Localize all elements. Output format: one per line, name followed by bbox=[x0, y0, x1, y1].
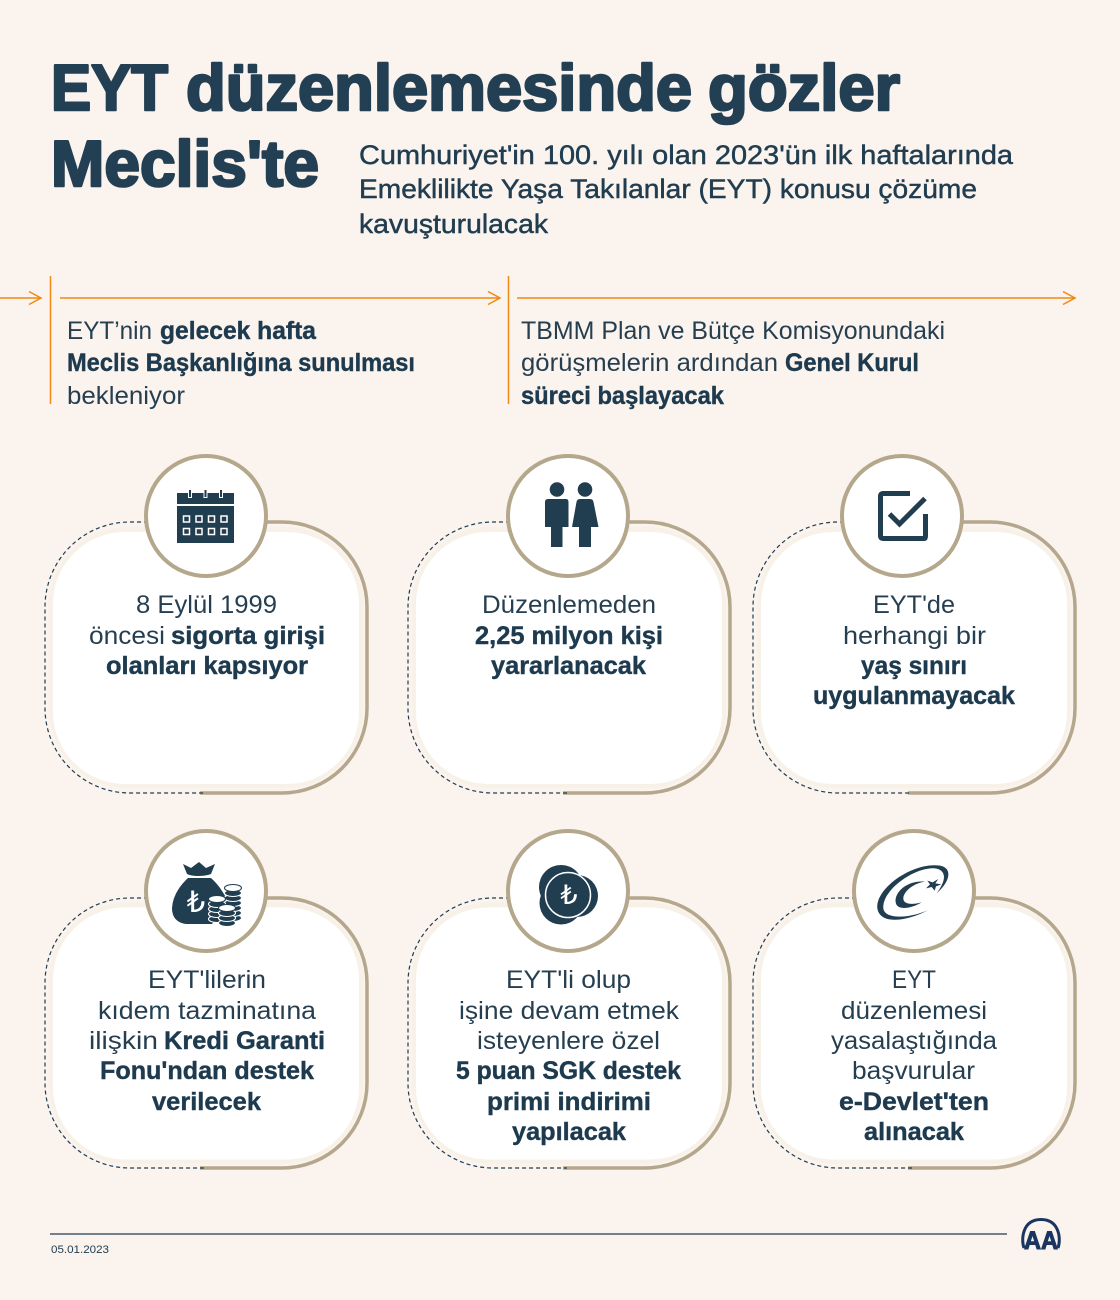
text: step 1: Meclis Başkanlığına sunulması bbox=[67, 349, 415, 377]
subtitle: kavuşturulacak bbox=[359, 209, 549, 239]
card 5 text: işine devam etmek bbox=[459, 997, 680, 1025]
card 4 text: verilecek bbox=[152, 1088, 261, 1116]
icon: coins: ₺ bbox=[560, 880, 578, 911]
card 6 text: yasalaştığında bbox=[831, 1027, 997, 1055]
text: step 1: EYT’nin bbox=[67, 317, 152, 345]
subtitle bbox=[359, 140, 1014, 239]
card 2 text bbox=[475, 591, 663, 680]
card 5 text: isteyenlere özel bbox=[477, 1027, 660, 1055]
card 6 text: alınacak bbox=[864, 1118, 964, 1146]
panel: card 1 bbox=[45, 456, 367, 793]
panel: card 3 bbox=[753, 456, 1075, 793]
card 6 text bbox=[831, 966, 997, 1146]
card 5 frame bbox=[408, 831, 730, 1168]
card 5 text: 5 puan SGK destek bbox=[456, 1057, 681, 1085]
card 2 text: 2,25 milyon kişi bbox=[475, 622, 663, 650]
card 3 text: EYT'de bbox=[873, 591, 955, 619]
panel: card 6 bbox=[753, 831, 1075, 1168]
card 6 text: e-Devlet'ten bbox=[839, 1088, 989, 1116]
panel: card 5 bbox=[408, 831, 730, 1168]
card 4 text: ilişkin bbox=[89, 1027, 158, 1055]
card 5 text: yapılacak bbox=[512, 1118, 626, 1146]
title: gözler bbox=[708, 51, 900, 124]
text: step 1: gelecek hafta bbox=[160, 317, 317, 345]
card 4 text: kıdem tazminatına bbox=[98, 997, 316, 1025]
card 6 text: EYT bbox=[892, 966, 936, 994]
subtitle: Cumhuriyet'in 100. yılı olan 2023'ün ilk haftalarında bbox=[359, 140, 1014, 170]
panel: card 2 bbox=[408, 456, 730, 793]
panel: card 4 bbox=[45, 831, 367, 1168]
icon: money bag: ₺ bbox=[187, 885, 205, 919]
card 1 frame bbox=[45, 456, 367, 793]
card 1 text: öncesi bbox=[89, 622, 165, 650]
text: step 1: bekleniyor bbox=[67, 382, 185, 410]
date: 05.01.2023 bbox=[51, 1244, 109, 1256]
card 5 text: EYT'li olup bbox=[506, 966, 631, 994]
card 4 text: Kredi Garanti bbox=[164, 1027, 325, 1055]
timeline step 2 bbox=[508, 276, 1075, 410]
footer rule bbox=[50, 1233, 1007, 1235]
card 1 text: olanları kapsıyor bbox=[106, 652, 308, 680]
card 6 text: başvurular bbox=[852, 1057, 975, 1085]
timeline step 1 bbox=[50, 276, 500, 410]
icon: money bag bbox=[172, 862, 242, 926]
subtitle: Emeklilikte Yaşa Takılanlar (EYT) konusu çözüme bbox=[359, 174, 977, 204]
icon: AA logo: AA bbox=[1024, 1227, 1058, 1255]
text: step 2: Genel Kurul bbox=[785, 349, 919, 377]
arrow: step 2 bbox=[508, 276, 1075, 404]
card 4 text bbox=[89, 966, 325, 1116]
card 2 frame bbox=[408, 456, 730, 793]
card 2 text: yararlanacak bbox=[491, 652, 646, 680]
card 4 frame bbox=[45, 831, 367, 1168]
card 3 text: uygulanmayacak bbox=[813, 682, 1015, 710]
card 5 text: primi indirimi bbox=[487, 1088, 651, 1116]
card 2 text: Düzenlemeden bbox=[482, 591, 656, 619]
card 1 text: 8 Eylül 1999 bbox=[136, 591, 277, 619]
text: step 2 bbox=[521, 317, 945, 410]
icon: checkbox bbox=[880, 494, 926, 538]
text: step 2: görüşmelerin ardından bbox=[521, 349, 778, 377]
card 1 text: sigorta girişi bbox=[171, 622, 325, 650]
arrow: lead-in bbox=[0, 292, 41, 304]
card 6 frame bbox=[753, 831, 1075, 1168]
title bbox=[51, 51, 900, 200]
card 3 frame bbox=[753, 456, 1075, 793]
title: EYT bbox=[51, 51, 168, 124]
card 5 text bbox=[456, 966, 681, 1146]
arrow: step 1 bbox=[50, 276, 500, 404]
text: step 1 bbox=[67, 317, 415, 410]
icon: people bbox=[545, 482, 598, 547]
text: step 2: TBMM Plan ve Bütçe Komisyonundaki bbox=[521, 317, 945, 345]
card 3 text: herhangi bir bbox=[843, 622, 986, 650]
card 4 text: EYT'lilerin bbox=[148, 966, 266, 994]
icon: e-Devlet crescent and star bbox=[877, 865, 948, 920]
title: düzenlemesinde bbox=[186, 51, 692, 124]
title: Meclis'te bbox=[51, 127, 319, 200]
card 6 text: düzenlemesi bbox=[841, 997, 987, 1025]
icon: coins bbox=[539, 865, 598, 924]
card 3 text bbox=[813, 591, 1015, 710]
card 1 text bbox=[89, 591, 325, 680]
card 3 text: yaş sınırı bbox=[861, 652, 967, 680]
icon: calendar bbox=[177, 489, 234, 543]
text: step 2: süreci başlayacak bbox=[521, 382, 724, 410]
card 4 text: Fonu'ndan destek bbox=[100, 1057, 314, 1085]
